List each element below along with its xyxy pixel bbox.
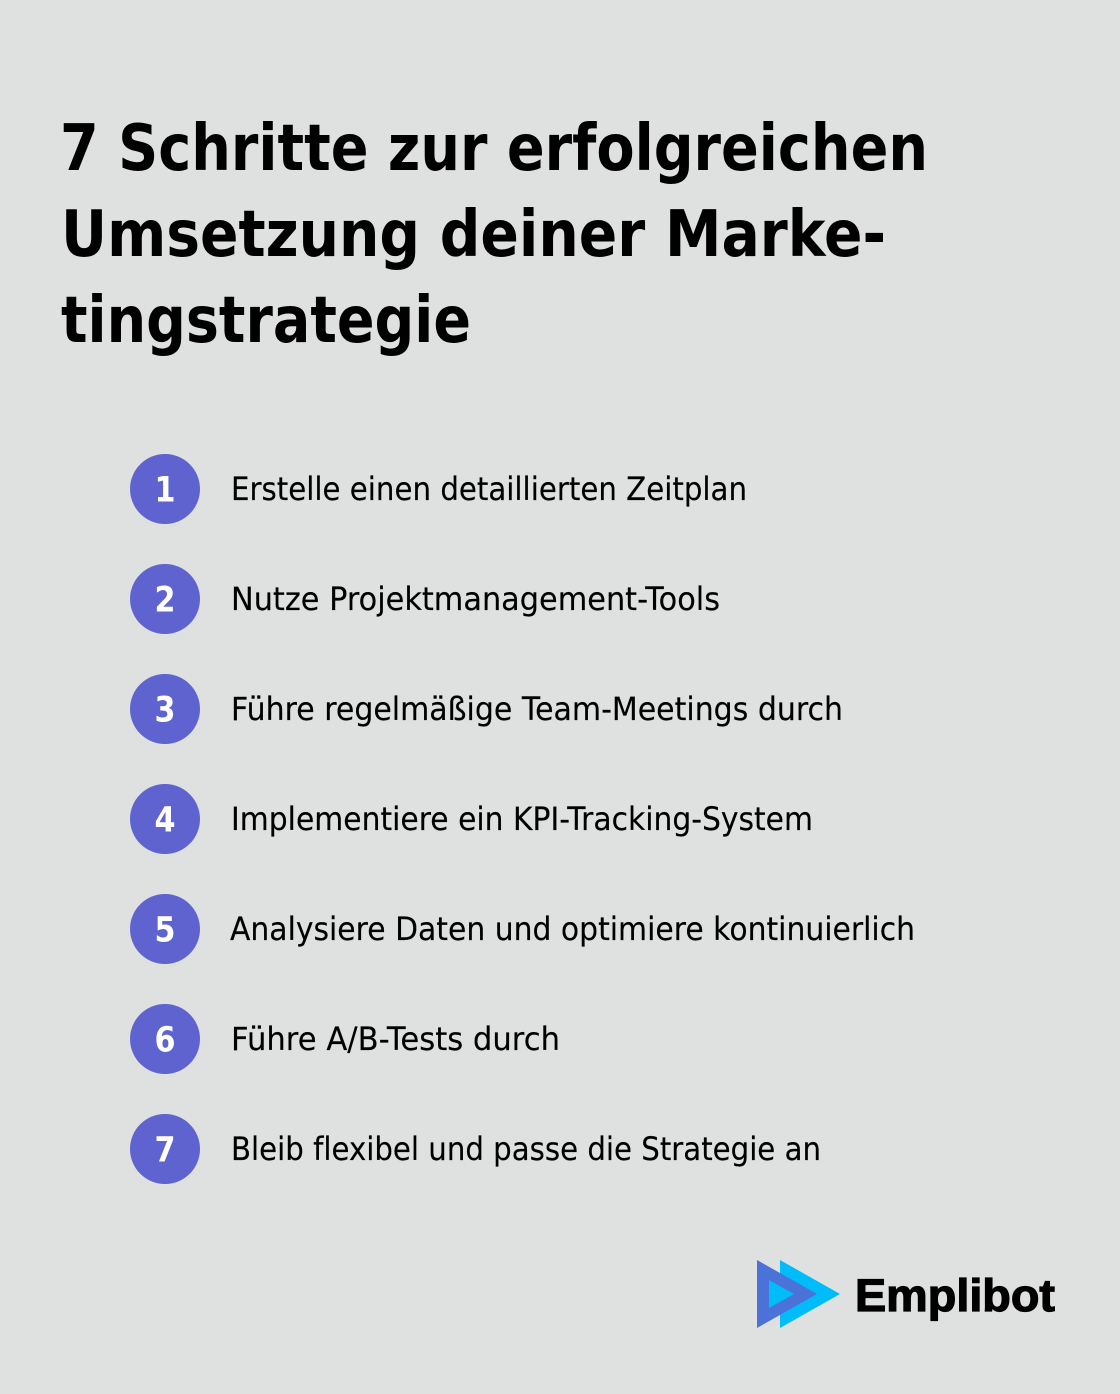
step 2: Nutze Projektmanagement-Tools xyxy=(231,580,720,618)
title: tingstrategie xyxy=(61,284,471,358)
step 1: 1 xyxy=(154,470,176,510)
title xyxy=(60,112,928,358)
step 6: 6 xyxy=(154,1020,176,1060)
step 7: Bleib flexibel und passe die Strategie an xyxy=(231,1130,821,1168)
step 5: Analysiere Daten und optimiere kontinuierlich xyxy=(230,910,915,948)
step 7 xyxy=(130,1114,821,1184)
step 4 xyxy=(130,784,813,854)
step 1: Erstelle einen detaillierten Zeitplan xyxy=(231,470,747,508)
step 2 xyxy=(130,564,720,634)
title: Umsetzung deiner Marke- xyxy=(61,198,886,272)
step 4: Implementiere ein KPI-Tracking-System xyxy=(231,800,813,838)
step 3 xyxy=(130,674,843,744)
step 1 xyxy=(130,454,747,524)
step 2: 2 xyxy=(154,580,176,620)
step 5 xyxy=(130,894,915,964)
step 3: 3 xyxy=(154,690,176,730)
step 7: 7 xyxy=(154,1130,176,1170)
step 6: Führe A/B-Tests durch xyxy=(231,1020,560,1058)
logo: Emplibot xyxy=(757,1260,1055,1328)
step 3: Führe regelmäßige Team-Meetings durch xyxy=(231,690,843,728)
title: 7 Schritte zur erfolgreichen xyxy=(60,112,928,186)
icon: play triangles xyxy=(757,1260,840,1328)
step 4: 4 xyxy=(154,800,176,840)
step list xyxy=(130,454,915,1184)
logo: Emplibot: Emplibot xyxy=(855,1270,1055,1321)
step 6 xyxy=(130,1004,560,1074)
step 5: 5 xyxy=(154,910,176,950)
